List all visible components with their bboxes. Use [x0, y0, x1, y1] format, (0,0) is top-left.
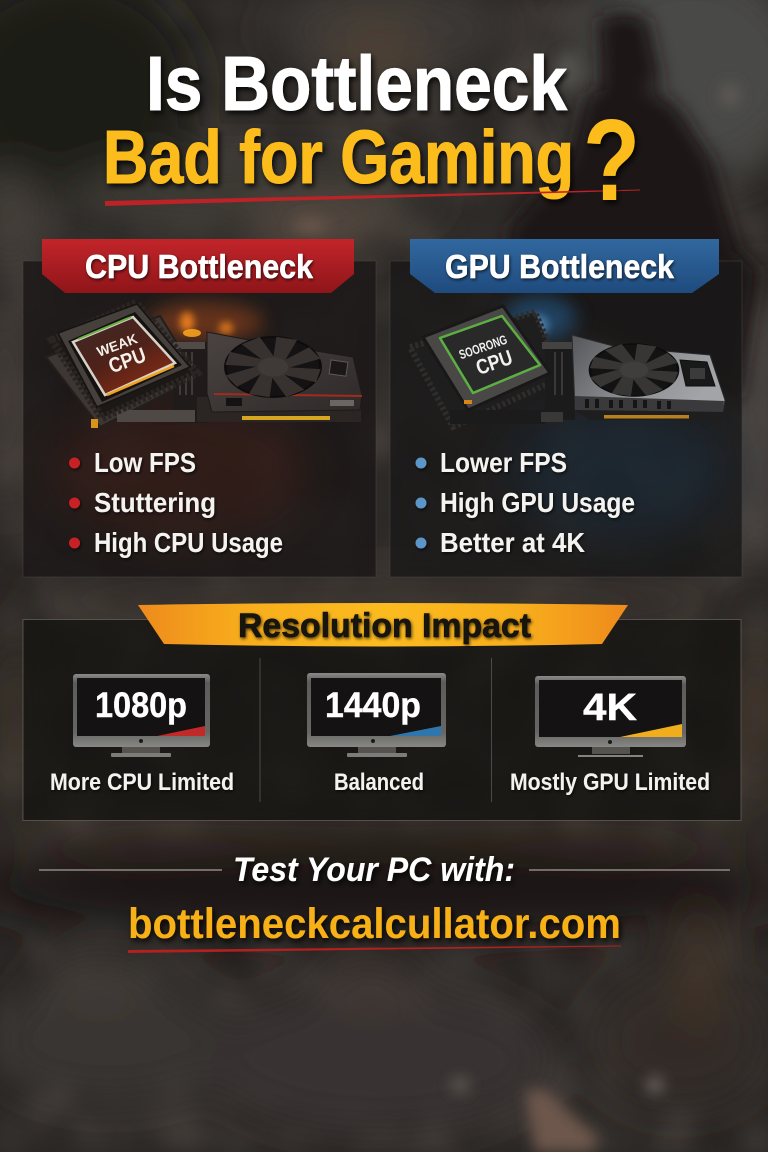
monitor: 1440p: 1440p	[325, 686, 421, 725]
ribbon: Resolution Impact	[138, 603, 628, 646]
monitor: 1080p	[73, 674, 210, 757]
CPU chip: weak	[52, 303, 197, 428]
caption: Balanced: Balanced	[334, 769, 424, 796]
panel: CPU bottleneck	[23, 239, 376, 577]
graphics card: dark	[117, 332, 362, 423]
ribbon: CPU Bottleneck: CPU Bottleneck	[85, 248, 314, 285]
CPU chip: strong: SOORONG	[457, 332, 509, 362]
CPU chip: strong: CPU	[473, 346, 516, 380]
title	[103, 41, 640, 225]
panel: resolution impact	[23, 603, 741, 820]
title: ?	[583, 95, 640, 225]
panel: GPU bottleneck	[390, 239, 742, 577]
panel tint: cool glow	[510, 400, 730, 540]
monitor: 1440p	[307, 673, 446, 757]
ribbon: Resolution Impact: Resolution Impact	[238, 607, 531, 645]
bullet list: CPU symptoms: High CPU Usage	[94, 527, 283, 558]
bullet list: GPU symptoms: Lower FPS	[440, 447, 567, 478]
panel tint: warm glow	[50, 400, 310, 540]
bullet list: GPU symptoms: Better at 4K	[440, 527, 585, 558]
bullet list: CPU symptoms: Stuttering	[94, 487, 216, 518]
bullet list: GPU symptoms: High GPU Usage	[440, 487, 635, 518]
bullet list: CPU symptoms: Low FPS	[94, 447, 196, 478]
monitor: 4K: 4K	[583, 687, 638, 729]
bullet list: CPU symptoms	[69, 447, 283, 558]
ribbon: GPU Bottleneck: GPU Bottleneck	[445, 248, 675, 285]
call to action: Test Your PC with:	[233, 851, 515, 889]
graphics card: silver	[450, 335, 725, 424]
CPU base plate	[410, 312, 563, 427]
bullet list: GPU symptoms	[416, 447, 635, 558]
monitor: 1080p: 1080p	[95, 686, 187, 725]
CPU chip: weak: WEAK	[95, 330, 139, 360]
blue smoke behind hardware	[504, 296, 576, 340]
fan	[582, 339, 686, 401]
title: Bad for Gaming	[103, 115, 574, 199]
caption: More CPU Limited: More CPU Limited	[50, 769, 234, 796]
ribbon: CPU Bottleneck	[42, 239, 354, 293]
CPU chip: strong	[423, 306, 550, 410]
CPU base plate	[46, 316, 198, 427]
blurred soldier silhouette	[500, 12, 760, 400]
call to action	[39, 851, 730, 953]
caption: Mostly GPU Limited: Mostly GPU Limited	[510, 769, 710, 796]
flames behind hardware	[147, 302, 263, 342]
ribbon: GPU Bottleneck	[410, 239, 719, 293]
fan	[217, 332, 329, 402]
title: Is Bottleneck	[146, 41, 567, 127]
monitor: 4K	[535, 676, 686, 757]
call to action: bottleneckcalcullator.com	[128, 900, 621, 948]
CPU chip: weak: CPU	[106, 344, 149, 378]
